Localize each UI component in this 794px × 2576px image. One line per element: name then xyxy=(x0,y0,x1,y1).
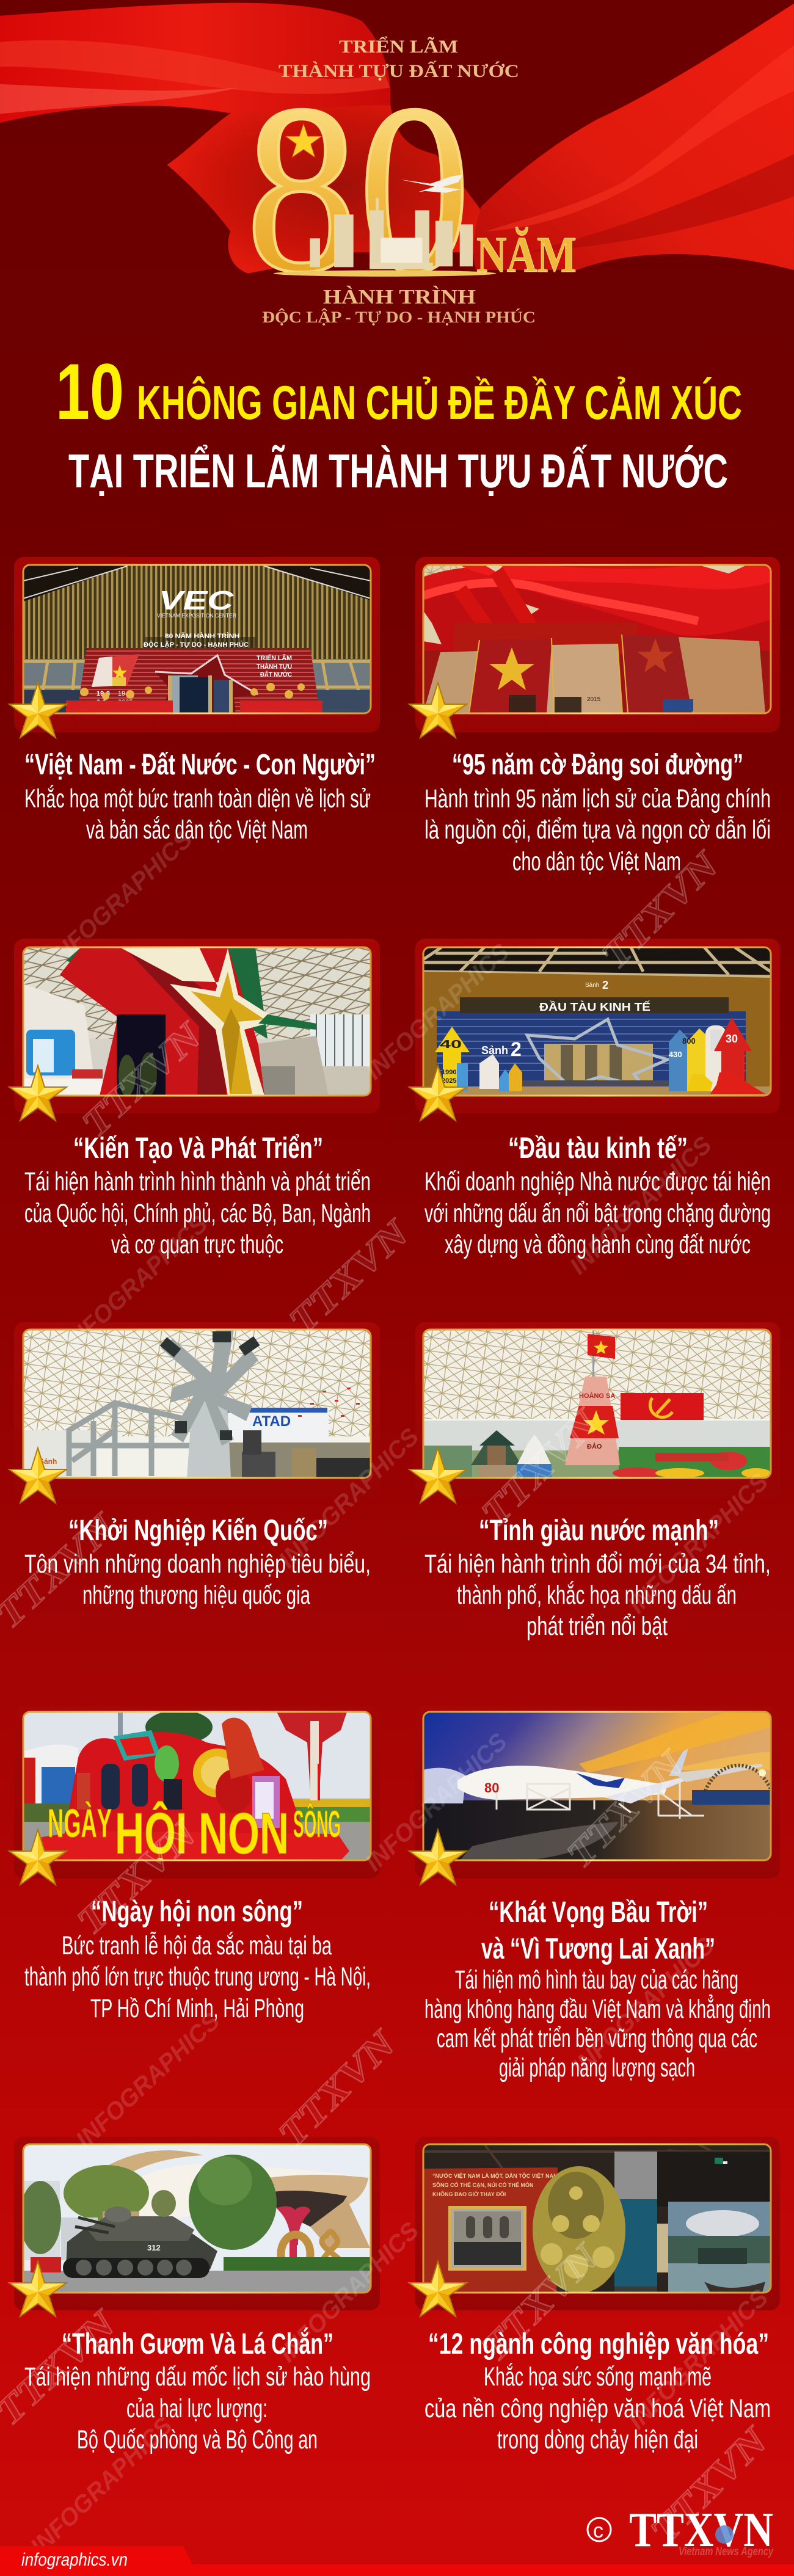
photo: VEC exhibition entrance: VEC xyxy=(159,586,235,616)
panel: Khát Vọng Bầu Trời và Vì Tương Lai Xanh xyxy=(409,1706,780,2083)
photo: VEC exhibition entrance: THÀNH TỰU xyxy=(257,663,292,671)
card description: Khắc họa một bức tranh toàn diện về lịch sử xyxy=(24,784,371,813)
watermark layer: TTXVN xyxy=(473,2235,607,2370)
photo: Hall 2 economic pioneers: 2025 xyxy=(442,1077,456,1085)
panel: Tỉnh giàu nước mạnh xyxy=(409,1322,780,1641)
watermark layer: INFOGRAPHICS xyxy=(565,1131,717,1279)
card description: phát triển nổi bật xyxy=(526,1612,668,1641)
watermark layer: INFOGRAPHICS xyxy=(26,2412,178,2560)
panel: Ngày hội non sông xyxy=(9,1706,380,2023)
photo: VEC exhibition entrance xyxy=(23,565,371,713)
card description: Bức tranh lễ hội đa sắc màu tại ba xyxy=(62,1931,332,1960)
panel: 12 ngành công nghiệp văn hóa xyxy=(409,2137,780,2454)
card title xyxy=(481,1896,715,1965)
card background xyxy=(14,1706,380,1879)
photo: Hall 2 economic pioneers: 40 xyxy=(440,1038,462,1050)
photo: VEC exhibition entrance: TRIỂN LÃM xyxy=(257,654,292,662)
watermark layer: TTXVN xyxy=(281,1211,418,1342)
watermark layer xyxy=(0,826,776,2560)
header: journey slogan xyxy=(262,286,536,326)
photo: steel structure exhibit: ATAD xyxy=(252,1413,291,1430)
photo: Hall 2 economic pioneers: 800 xyxy=(682,1036,696,1046)
card title: “Khởi Nghiệp Kiến Quốc” xyxy=(68,1515,328,1547)
photo: VEC exhibition entrance: ĐẤT NƯỚC xyxy=(260,671,292,679)
watermark layer: INFOGRAPHICS xyxy=(360,939,515,1085)
photo: Hall 2 economic pioneers: Sảnh xyxy=(585,982,599,989)
footer: website: infographics.vn xyxy=(21,2550,128,2570)
watermark layer: TTXVN xyxy=(594,843,727,977)
card description xyxy=(424,1549,771,1641)
photo: Hall 2 economic pioneers: 2 xyxy=(602,979,608,991)
photo: Hall 2 economic pioneers: Sảnh xyxy=(481,1044,508,1057)
card description: và bản sắc dân tộc Việt Nam xyxy=(86,815,308,845)
watermark layer: INFOGRAPHICS xyxy=(43,826,198,972)
card description xyxy=(424,2362,771,2454)
icon: gold star xyxy=(409,1066,467,1121)
footer band xyxy=(0,2546,794,2576)
icon: gold star xyxy=(409,1830,467,1885)
card description: Tái hiện hành trình hình thành và phát triển xyxy=(24,1167,371,1196)
header: journey slogan: HÀNH TRÌNH xyxy=(323,286,476,308)
card description: những thương hiệu quốc gia xyxy=(82,1581,310,1610)
card description: thành phố lớn trực thuộc trung ương - Hà Nội, xyxy=(24,1962,371,1992)
photo frame xyxy=(423,947,771,1096)
watermark layer: INFOGRAPHICS xyxy=(623,2284,774,2434)
photo: VEC exhibition entrance: 2-9 xyxy=(97,699,106,706)
photo frame xyxy=(423,2144,771,2293)
icon: gold star xyxy=(409,683,467,738)
card description: Tôn vinh những doanh nghiệp tiêu biểu, xyxy=(24,1549,371,1579)
card description xyxy=(24,2362,371,2454)
icon: gold star xyxy=(9,1448,67,1503)
photo: province pavilion with flag: HOÀNG SA xyxy=(579,1392,615,1400)
card title: “Đầu tàu kinh tế” xyxy=(508,1132,688,1165)
watermark layer: TTXVN xyxy=(74,1014,211,1145)
photo: cultural industries gallery xyxy=(423,2144,771,2293)
header: red silk ribbons xyxy=(0,3,794,274)
photo frame xyxy=(23,565,371,713)
photo: VEC exhibition entrance: 1945 xyxy=(118,690,133,697)
card description xyxy=(24,1167,371,1259)
card title: “Thanh Gươm Và Lá Chắn” xyxy=(62,2327,333,2360)
watermark layer: TTXVN xyxy=(69,1811,206,1943)
header: exhibition title: TRIỂN LÃM xyxy=(339,37,458,57)
watermark layer: INFOGRAPHICS xyxy=(274,2217,424,2367)
watermark layer: TTXVN xyxy=(559,1742,693,1876)
photo: cultural industries gallery: KHÔNG BAO GIỜ THAY ĐỔI xyxy=(432,2191,506,2197)
photo: steel structure exhibit: 3 xyxy=(42,1467,47,1477)
panel: Đầu tàu kinh tế xyxy=(409,939,780,1259)
header: exhibition title: THÀNH TỰU ĐẤT NƯỚC xyxy=(279,60,519,81)
photo: VEC exhibition entrance: ĐỘC LẬP - TỰ DO - HẠNH PHÚC xyxy=(144,641,249,649)
photo: festival installation: SÔNG xyxy=(293,1803,341,1846)
photo: tank in front of the expo center xyxy=(20,2144,371,2293)
photo frame xyxy=(423,565,771,713)
icon: gold star xyxy=(9,1066,67,1121)
icon: gold star xyxy=(409,2261,467,2316)
icon: gold star xyxy=(9,683,67,738)
photo frame xyxy=(23,947,371,1096)
card background xyxy=(415,1706,780,1879)
card title: “Kiến Tạo Và Phát Triển” xyxy=(73,1132,323,1165)
card background xyxy=(415,939,780,1113)
photo: Hall 2 economic pioneers: 1990 xyxy=(442,1069,456,1076)
watermark layer: INFOGRAPHICS xyxy=(360,1728,512,1876)
watermark layer: INFOGRAPHICS xyxy=(71,2007,225,2154)
card background xyxy=(14,557,380,732)
card description xyxy=(24,1931,371,2023)
icon: gold star xyxy=(9,2261,67,2316)
panel: 95 năm cờ Đảng soi đường xyxy=(409,557,780,876)
card background xyxy=(415,2137,780,2310)
main title xyxy=(56,347,742,498)
card description: của hai lực lượng: xyxy=(126,2394,268,2423)
card background xyxy=(415,1322,780,1497)
photo: VEC exhibition entrance: 2025 xyxy=(118,699,133,706)
photo: aircraft at sunset: 80 xyxy=(484,1780,499,1796)
photo: steel structure exhibit: Sảnh xyxy=(39,1457,57,1466)
card description: Tái hiện những dấu mốc lịch sử hào hùng xyxy=(24,2362,371,2392)
photo: province pavilion with flag: ĐẢO xyxy=(587,1443,602,1450)
photo: festival installation: NGÀY xyxy=(48,1800,112,1846)
card description xyxy=(24,1549,371,1610)
photo: tank in front of the expo center: 312 xyxy=(147,2243,161,2252)
logo: 80 năm: NĂM xyxy=(476,227,577,283)
card description xyxy=(424,784,771,876)
photo: steel structure exhibit xyxy=(23,1330,371,1478)
photo frame xyxy=(423,1330,771,1478)
footer: copyright symbol: c xyxy=(593,2519,603,2542)
photo: red flags over display panels xyxy=(423,565,771,713)
photo: Hall 2 economic pioneers: 430 xyxy=(669,1050,682,1059)
card background xyxy=(415,557,780,732)
watermark layer: TTXVN xyxy=(473,1400,607,1535)
photo: province pavilion with flag xyxy=(423,1330,771,1479)
photo: Hall 2 economic pioneers xyxy=(423,947,771,1096)
card background xyxy=(14,1322,380,1497)
photo: festival installation xyxy=(23,1710,371,1866)
card background xyxy=(14,939,380,1113)
footer: copyright symbol xyxy=(588,2518,611,2542)
card description xyxy=(424,1965,771,2083)
photo: Hall 2 economic pioneers: 2 xyxy=(511,1038,522,1060)
card title: “Khát Vọng Bầu Trời” xyxy=(489,1896,708,1929)
card description xyxy=(24,784,371,845)
photo: festival installation: HỘI NON xyxy=(115,1800,289,1866)
icon: gold star xyxy=(409,1448,467,1503)
photo: Hall 2 economic pioneers: ĐẦU TÀU KINH TẾ xyxy=(539,1000,650,1013)
panel: Thanh Gươm Và Lá Chắn xyxy=(9,2137,380,2454)
photo: VEC exhibition entrance: VIETNAM EXPOSITION CENTER xyxy=(157,613,236,619)
card description: Bộ Quốc phòng và Bộ Công an xyxy=(77,2425,318,2454)
card description: TP Hồ Chí Minh, Hải Phòng xyxy=(90,1994,304,2023)
card description: cho dân tộc Việt Nam xyxy=(512,847,681,876)
card title: “Ngày hội non sông” xyxy=(91,1896,303,1928)
watermark layer: TTXVN xyxy=(271,2021,404,2156)
card description: của Quốc hội, Chính phủ, các Bộ, Ban, Ngành xyxy=(24,1199,371,1228)
panel: Khởi Nghiệp Kiến Quốc xyxy=(9,1322,380,1610)
photo frame xyxy=(23,2144,371,2293)
photo frame xyxy=(423,1712,771,1860)
panel: Kiến Tạo Và Phát Triển xyxy=(9,939,380,1259)
photo: VEC exhibition entrance: 19-8 xyxy=(97,690,110,697)
watermark layer: INFOGRAPHICS xyxy=(623,1468,774,1618)
photo: cultural industries gallery: SÔNG CÓ THỂ CẠN, NÚI CÓ THỂ MÒN xyxy=(432,2181,534,2188)
photo: aircraft at sunset xyxy=(423,1712,773,1860)
photo: red and gold star pavilion xyxy=(23,947,371,1096)
photo: cultural industries gallery: “NƯỚC VIỆT NAM LÀ MỘT, DÂN TỘC VIỆT NAM xyxy=(432,2172,558,2179)
card description: trong dòng chảy hiện đại xyxy=(497,2425,698,2454)
card description xyxy=(424,1167,771,1259)
watermark layer: TTXVN xyxy=(643,2418,776,2553)
watermark layer: INFOGRAPHICS xyxy=(59,1210,213,1357)
photo frame xyxy=(23,1330,371,1478)
watermark layer: INFOGRAPHICS xyxy=(274,1423,424,1573)
photo: red flags over display panels: 2015 xyxy=(587,696,601,703)
watermark layer: INFOGRAPHICS xyxy=(567,1932,719,2080)
photo: VEC exhibition entrance: 80 NĂM HÀNH TRÌNH xyxy=(165,632,239,640)
icon: gold star xyxy=(9,1830,67,1885)
logo: 80 năm: 80 xyxy=(246,56,471,322)
header: exhibition title xyxy=(279,37,519,81)
header: journey slogan: ĐỘC LẬP - TỰ DO - HẠNH PHÚC xyxy=(262,308,536,326)
photo frame xyxy=(23,1712,371,1860)
card title: “Việt Nam - Đất Nước - Con Người” xyxy=(24,749,376,781)
photo: Hall 2 economic pioneers: 30 xyxy=(726,1033,738,1045)
card description: và cơ quan trực thuộc xyxy=(111,1230,283,1259)
card background xyxy=(14,2137,380,2310)
main title: 10 xyxy=(56,347,124,436)
panel: Việt Nam - Đất Nước - Con Người xyxy=(9,557,380,845)
